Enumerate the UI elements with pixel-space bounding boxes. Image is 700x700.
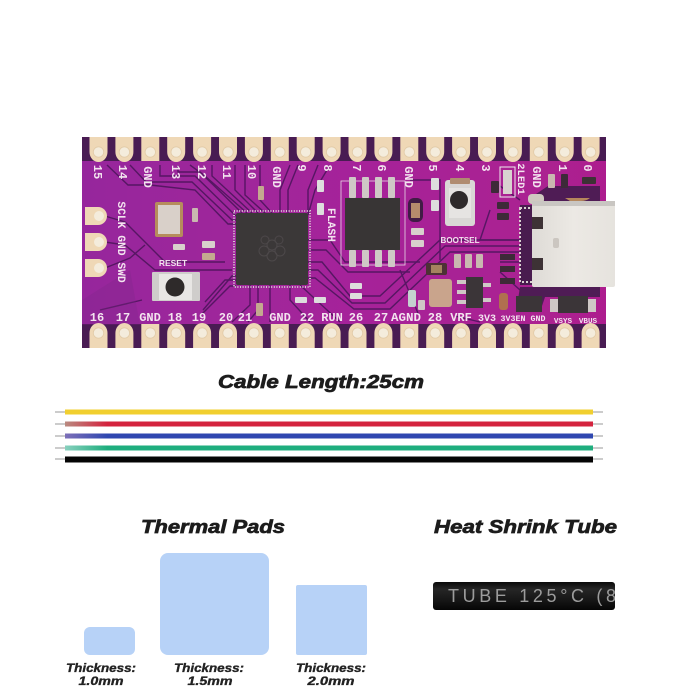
bottom pin labels: VSYS xyxy=(554,318,573,326)
top pin labels: 7 xyxy=(349,164,363,172)
top pin labels: GND xyxy=(269,166,283,188)
red wire xyxy=(65,422,593,426)
bottom pin labels: 21 xyxy=(238,311,252,325)
bootsel button xyxy=(445,178,475,226)
silkscreen labels: BOOTSEL xyxy=(440,236,480,245)
copper traces xyxy=(100,165,530,322)
bottom pin labels: 22 xyxy=(300,311,314,325)
top pin labels xyxy=(90,163,594,195)
crystal xyxy=(155,202,183,237)
top pin labels: 12 xyxy=(194,165,208,179)
top pin labels: 0 xyxy=(580,164,594,172)
raspberry logo xyxy=(259,236,285,261)
top right passives xyxy=(491,174,596,220)
bottom pin labels: VBUS xyxy=(579,318,598,326)
Schottky diode xyxy=(550,296,596,313)
top pin labels: 3 xyxy=(478,164,492,172)
thermal pad 2.0mm xyxy=(296,585,367,655)
bottom pin labels: 18 xyxy=(168,311,182,325)
darker shading xyxy=(82,270,140,325)
bottom pin labels: 3V3EN xyxy=(501,315,525,324)
top pin labels: GND xyxy=(401,166,415,188)
tube print: TUBE 125°C (8 xyxy=(448,586,616,606)
wire tips xyxy=(55,412,603,459)
silkscreen labels xyxy=(114,201,480,283)
label: thickness 1.5mm xyxy=(174,661,244,688)
heading: thermal pads: Thermal Pads xyxy=(141,517,285,537)
capacitors near flash xyxy=(350,178,439,299)
green wire xyxy=(65,446,593,450)
board body xyxy=(82,137,606,347)
top pin labels: 2LED1 xyxy=(514,163,526,195)
label: thickness 2.0mm xyxy=(296,661,366,688)
infographic canvas xyxy=(55,137,617,686)
top pin labels: 11 xyxy=(219,165,233,179)
bottom pin labels: 16 xyxy=(90,311,104,325)
USB-C connector xyxy=(520,194,615,287)
top pin labels: 9 xyxy=(294,164,308,172)
bottom pin labels: GND xyxy=(531,315,545,324)
bottom pin labels: 17 xyxy=(116,311,130,325)
silkscreen labels: RESET xyxy=(159,258,188,268)
circuit board xyxy=(82,137,615,348)
top pin labels: 14 xyxy=(115,165,129,179)
top pin labels: 8 xyxy=(320,164,334,172)
heading: heat shrink tube: Heat Shrink Tube xyxy=(434,517,617,537)
bottom pin labels: 3V3 xyxy=(478,314,496,325)
thermal pad 1.0mm xyxy=(84,627,135,655)
top pin labels: 6 xyxy=(374,164,388,172)
bottom pin labels: 28 xyxy=(428,311,442,325)
bottom pin labels: VRF xyxy=(450,311,472,325)
dark copper patch above USB xyxy=(530,186,600,201)
bottom castellated pads xyxy=(90,323,600,348)
label: thickness 1.0mm: 1.0mm xyxy=(78,674,124,688)
bottom pin labels: 26 xyxy=(349,311,363,325)
label: thickness 2.0mm: 2.0mm xyxy=(306,674,355,688)
bottom pin labels: 19 xyxy=(192,311,206,325)
label: thickness 1.0mm xyxy=(66,661,136,688)
RP2040 chip xyxy=(234,211,310,287)
top pin labels: 10 xyxy=(244,165,258,179)
bottom pin labels: RUN xyxy=(321,311,343,325)
silkscreen labels: SCLK GND SWD xyxy=(114,201,126,283)
power components xyxy=(408,254,542,312)
top pin labels: 4 xyxy=(452,164,466,172)
silkscreen labels: FLASH xyxy=(324,208,336,242)
cable set xyxy=(55,410,603,462)
top pin labels: 5 xyxy=(425,164,439,172)
debug side pads xyxy=(85,207,107,277)
top pin labels: 13 xyxy=(168,165,182,179)
thermal pad 1.5mm xyxy=(160,553,269,655)
flash chip xyxy=(341,177,405,267)
label: thickness 1.5mm: 1.5mm xyxy=(188,674,233,688)
yellow wire xyxy=(65,410,593,414)
top pin labels: GND xyxy=(140,166,154,188)
dark copper patch below USB xyxy=(516,287,600,312)
blue wire xyxy=(65,434,593,438)
tube body xyxy=(433,582,615,610)
bottom pin labels: AGND xyxy=(391,311,421,325)
top pad edge band xyxy=(82,137,606,161)
bottom pad edge band xyxy=(82,324,606,348)
bottom pin labels: 20 xyxy=(219,311,233,325)
bottom pin labels: GND xyxy=(139,311,161,325)
top castellated pads xyxy=(90,137,600,162)
heat shrink tube xyxy=(433,582,616,610)
heading: cable length: Cable Length:25cm xyxy=(218,372,424,392)
bottom pin labels: 27 xyxy=(374,311,388,325)
LED xyxy=(500,167,515,197)
black wire xyxy=(65,456,593,462)
label: thickness 1.0mm: Thickness: xyxy=(66,661,136,675)
bottom pin labels xyxy=(90,311,598,326)
label: thickness 2.0mm: Thickness: xyxy=(296,661,366,675)
top pin labels: GND xyxy=(529,166,543,188)
small passives left xyxy=(173,180,326,316)
top pin labels: 1 xyxy=(555,164,569,172)
bottom pin labels: GND xyxy=(269,311,291,325)
top pin labels: 15 xyxy=(90,165,104,179)
label: thickness 1.5mm: Thickness: xyxy=(174,661,244,675)
reset button xyxy=(152,272,200,301)
